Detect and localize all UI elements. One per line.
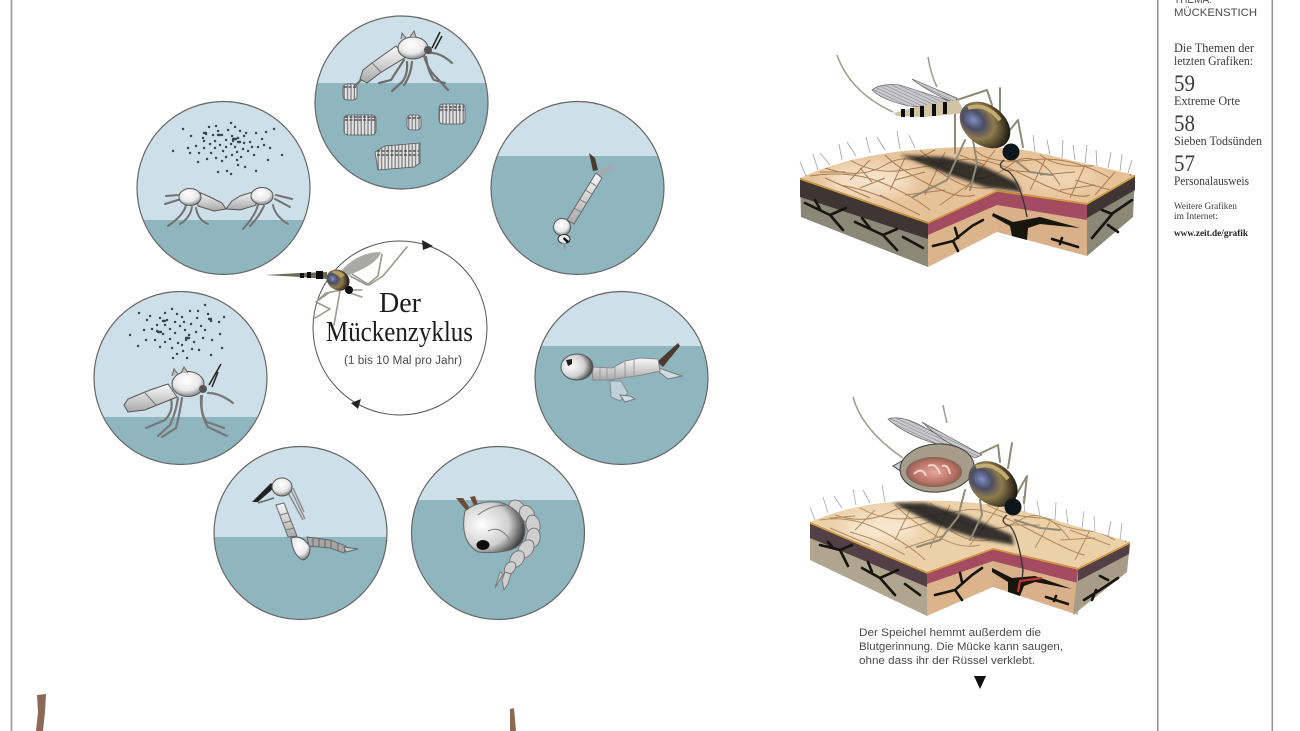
panel: left circle, swarm and adult (94, 291, 268, 465)
icon: egg-laying mosquito (351, 31, 452, 91)
issue 57 (1174, 151, 1249, 188)
mosquito (837, 55, 1052, 217)
issue 57: Personalausweis (1174, 174, 1249, 188)
skin block faces (810, 522, 1130, 616)
skin surface (810, 485, 1130, 572)
icon: hatching mosquito (252, 478, 358, 560)
icon: mating mosquitoes (165, 188, 292, 229)
icon: hanging larva (554, 153, 613, 251)
arrow: continues below (974, 676, 986, 689)
panel: bottom left circle, hatching adult (214, 446, 388, 620)
issue 58 (1174, 111, 1262, 148)
sidebar theme label: MÜCKENSTICH (1174, 7, 1257, 19)
icon: larva (561, 343, 682, 402)
sidebar intro: Die Themen der (1174, 41, 1255, 55)
title: Der: Der (379, 288, 422, 319)
icon: mosquito swarm (173, 123, 282, 174)
issue 58: 58 (1174, 111, 1195, 136)
panel: upper left circle, mating (137, 101, 311, 275)
icon: mosquito swarm (130, 305, 224, 358)
panel: right circle, larva with shed skin (535, 291, 709, 465)
web link: www.zeit.de/grafik (1174, 229, 1249, 239)
caption: ohne dass ihr der Rüssel verklebt. (859, 655, 1035, 667)
cycle ring with arrows (313, 240, 487, 415)
panel: skin block with feeding mosquito (810, 397, 1130, 689)
caption: Blutgerinnung. Die Mücke kann saugen, (859, 641, 1063, 653)
web link (1174, 201, 1249, 239)
web link: Weitere Grafiken (1174, 201, 1237, 211)
web link: im Internet: (1174, 211, 1218, 221)
sidebar (1174, 0, 1262, 239)
panel: upper right circle, larva (491, 101, 665, 275)
skin surface (800, 131, 1135, 222)
subtitle: (1 bis 10 Mal pro Jahr) (344, 355, 462, 367)
icon: adult mosquito on ring (265, 247, 407, 325)
vessel trunk (992, 568, 1072, 596)
issue 59: Extreme Orte (1174, 94, 1240, 108)
plant stalks at bottom edge (36, 694, 516, 731)
sidebar intro (1174, 41, 1255, 68)
blood in vessel (1018, 578, 1042, 592)
skin block faces (800, 175, 1135, 267)
panel: skin block with mosquito before feeding (800, 55, 1135, 267)
feeding mosquito (853, 397, 1060, 580)
panel: center cycle title (265, 240, 487, 415)
hairs (810, 485, 1122, 540)
title: Mückenzyklus: Mückenzyklus (326, 317, 473, 348)
issue 59: 59 (1174, 71, 1195, 96)
panel: bottom right circle, pupa (411, 446, 585, 620)
issue 59 (1174, 71, 1240, 108)
caption: Der Speichel hemmt außerdem die (859, 627, 1041, 639)
sidebar intro: letzten Grafiken: (1174, 54, 1253, 68)
panel: top circle, egg laying (315, 16, 489, 190)
icon: pupa (456, 496, 542, 590)
issue 57: 57 (1174, 151, 1195, 176)
blood vessels (820, 542, 1118, 604)
mosquito shadow (900, 155, 1022, 192)
caption (859, 627, 1063, 667)
vessel trunk (992, 213, 1080, 240)
hairs (800, 131, 1132, 176)
mosquito shadow (893, 503, 1014, 545)
icon: adult mosquito (124, 364, 233, 437)
blood vessels (805, 200, 1132, 251)
sidebar theme label (1174, 0, 1257, 19)
icon: egg rafts (343, 84, 465, 170)
issue 58: Sieben Todsünden (1174, 134, 1262, 148)
